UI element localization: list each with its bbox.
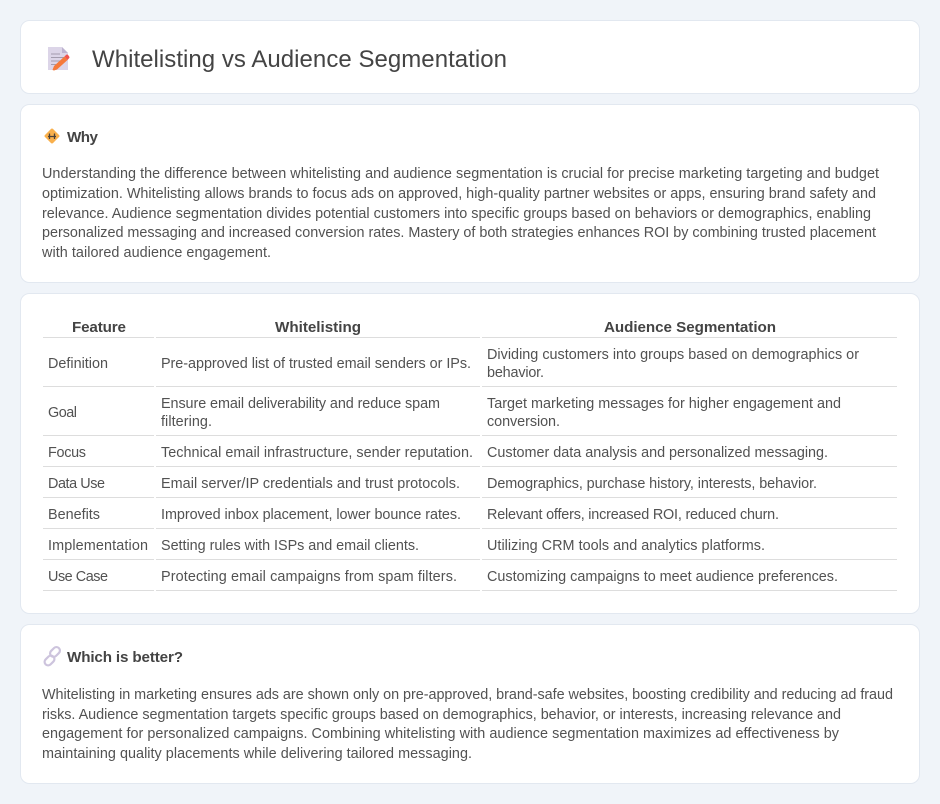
row: implementation: Setting rules with ISPs and email clients. bbox=[161, 538, 419, 554]
row: definition: Pre-approved list of trusted email senders or IPs. bbox=[161, 356, 471, 372]
row: use case bbox=[48, 569, 838, 585]
row: benefits: Relevant offers, increased ROI, reduced churn. bbox=[487, 507, 779, 523]
panel: title header bbox=[20, 20, 920, 94]
row: definition: behavior. bbox=[487, 365, 544, 381]
row: benefits: Benefits bbox=[48, 507, 100, 523]
table header row: Whitelisting bbox=[275, 319, 361, 336]
row: use case: Customizing campaigns to meet audience preferences. bbox=[487, 569, 838, 585]
text block: why paragraph: Understanding the difference between whitelisting and audience segmentation is crucial for precise marketing targeting and budget bbox=[42, 166, 879, 182]
row: data use bbox=[48, 476, 817, 492]
row: goal: Goal bbox=[48, 405, 77, 421]
text block: which is better paragraph: maintaining quality placements while delivering tailored messaging. bbox=[42, 746, 472, 762]
row: goal bbox=[48, 396, 841, 430]
row: implementation: Utilizing CRM tools and analytics platforms. bbox=[487, 538, 765, 554]
row: goal: Ensure email deliverability and reduce spam bbox=[161, 396, 440, 412]
table header row bbox=[72, 319, 776, 336]
text block: which is better paragraph: Whitelisting in marketing ensures ads are shown only on pre-approved, brand-safe websites, boosting credibility and reducing ad fraud bbox=[42, 687, 893, 703]
text block: why paragraph: optimization. Whitelisting allows brands to focus ads on approved, high-quality partner websites or apps, ensuring brand safety and bbox=[42, 186, 876, 202]
panel: comparison table bbox=[20, 294, 920, 614]
icon: document with pencil bbox=[48, 47, 69, 70]
text block: which is better paragraph bbox=[42, 687, 893, 762]
text block: why paragraph: relevance. Audience segmentation divides potential customers into specific groups based on behaviors or demographics, enabling bbox=[42, 206, 871, 222]
row: implementation bbox=[48, 538, 765, 554]
row: data use: Data Use bbox=[48, 476, 105, 492]
panel: why bbox=[20, 104, 920, 282]
row: benefits bbox=[48, 507, 779, 523]
row: focus: Technical email infrastructure, sender reputation. bbox=[161, 445, 473, 461]
row: focus: Focus bbox=[48, 445, 86, 461]
row: definition bbox=[48, 347, 859, 381]
row: use case: Use Case bbox=[48, 569, 108, 585]
row: data use: Email server/IP credentials and trust protocols. bbox=[161, 476, 460, 492]
row: goal: Target marketing messages for higher engagement and bbox=[487, 396, 841, 412]
heading: why: Why bbox=[67, 129, 99, 146]
text block: why paragraph: with tailored audience engagement. bbox=[41, 245, 271, 261]
table header row: Audience Segmentation bbox=[604, 319, 776, 336]
title: Whitelisting vs Audience Segmentation bbox=[92, 46, 507, 73]
row: definition: Dividing customers into groups based on demographics or bbox=[487, 347, 859, 363]
row: use case: Protecting email campaigns from spam filters. bbox=[161, 569, 457, 585]
text block: which is better paragraph: risks. Audience segmentation targets specific groups based on demographics, behavior, or interests, increasing relevance and bbox=[42, 707, 841, 723]
text block: why paragraph: personalized messaging and increased conversion rates. Mastery of both strategies enhances ROI by combining trusted placement bbox=[42, 225, 876, 241]
icon: orange diamond sign bbox=[44, 128, 60, 144]
row: focus bbox=[48, 445, 828, 461]
panel: which is better bbox=[20, 624, 920, 784]
row: implementation: Implementation bbox=[48, 538, 148, 554]
row: goal: filtering. bbox=[161, 414, 212, 430]
heading: which is better: Which is better? bbox=[67, 649, 183, 666]
row: focus: Customer data analysis and personalized messaging. bbox=[487, 445, 828, 461]
row: definition: Definition bbox=[48, 356, 108, 372]
text block: which is better paragraph: engagement for personalized campaigns. Combining whitelisting with audience segmentation maximizes ad effectiveness by bbox=[42, 726, 840, 742]
row: benefits: Improved inbox placement, lower bounce rates. bbox=[161, 507, 461, 523]
table header row: Feature bbox=[72, 319, 126, 336]
row: goal: conversion. bbox=[487, 414, 560, 430]
text block: why paragraph bbox=[41, 166, 879, 261]
row: data use: Demographics, purchase history, interests, behavior. bbox=[487, 476, 817, 492]
icon: chain link bbox=[43, 646, 61, 667]
